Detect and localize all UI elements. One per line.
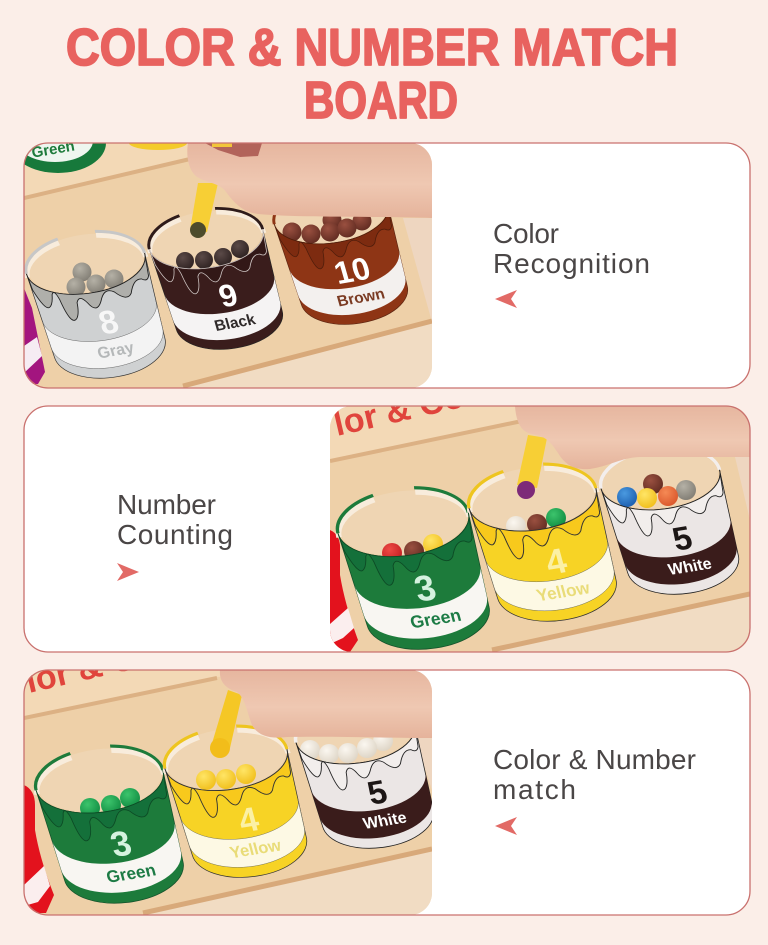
arrow: left (495, 817, 517, 835)
can: white 5: 5 (364, 774, 391, 812)
can: green 3: Green (104, 860, 158, 887)
can: green 3 (336, 486, 490, 650)
panel: color and number match (23, 669, 751, 916)
panel: number counting (23, 405, 751, 653)
icon: yellow stick with purple tip (517, 435, 547, 499)
can: green 3 (34, 744, 184, 904)
can: brown 10: Brown (335, 286, 387, 310)
can: white 5: White (361, 809, 409, 833)
can: yellow 4: Yellow (228, 836, 283, 862)
can: green 3: 3 (410, 567, 440, 610)
can: gray 8 (24, 230, 166, 379)
can: white 5 (598, 457, 740, 595)
partial green can: Green (30, 137, 76, 162)
can: white 5 (294, 736, 432, 849)
caption: color and number match (493, 744, 696, 805)
can: white 5: 5 (669, 520, 696, 558)
can: white 5: White (666, 555, 714, 579)
photo: gray, black and brown paint cans (24, 143, 432, 388)
photo: green, yellow and white paint cans (330, 406, 750, 652)
can: green 3: Green (408, 605, 463, 632)
photo: hand (187, 143, 432, 218)
partial red can (24, 785, 54, 913)
photo: green, yellow and white cans with matching beads (24, 670, 432, 914)
can: yellow 4: 4 (234, 801, 263, 840)
caption: number counting (117, 489, 233, 550)
can: black 9: 9 (214, 276, 242, 314)
photo: hand (515, 406, 750, 469)
panel: color recognition (23, 142, 751, 389)
caption: color and number match: match (493, 774, 576, 805)
title: COLOR & NUMBER MATCH (66, 20, 678, 77)
can: gray 8: 8 (95, 303, 123, 342)
can: yellow 4 (466, 462, 617, 622)
icon: yellow stick with yellow tip (210, 690, 242, 758)
arrow: left (495, 290, 517, 308)
caption: number counting: Counting (117, 519, 233, 550)
can: brown 10 (272, 215, 408, 325)
caption: color recognition: Color (493, 218, 559, 249)
can: black 9: Black (213, 311, 258, 335)
partial purple can (24, 288, 45, 384)
caption: color recognition (493, 218, 650, 279)
board title text, cropped: lor & Col (22, 632, 169, 701)
title: BOARD (304, 73, 458, 130)
icon: yellow magnetic stick (190, 183, 218, 238)
can: brown 10: 10 (330, 250, 374, 291)
partial yellow can (129, 144, 187, 150)
title (66, 20, 678, 130)
partial green can (24, 143, 106, 173)
photo: hand (220, 670, 432, 738)
can: yellow 4 (162, 724, 308, 878)
can: black 9 (147, 207, 284, 350)
board title text, cropped: lor & Col (330, 375, 477, 444)
partial red can (330, 530, 358, 652)
can: green 3: 3 (106, 823, 136, 865)
can: yellow 4: 4 (541, 541, 571, 582)
arrow: right (117, 563, 139, 581)
can: gray 8: Gray (95, 339, 136, 362)
can: yellow 4: Yellow (534, 577, 592, 605)
caption: color and number match: Color & Number (493, 744, 696, 775)
caption: color recognition: Recognition (493, 248, 650, 279)
caption: number counting: Number (117, 489, 216, 520)
